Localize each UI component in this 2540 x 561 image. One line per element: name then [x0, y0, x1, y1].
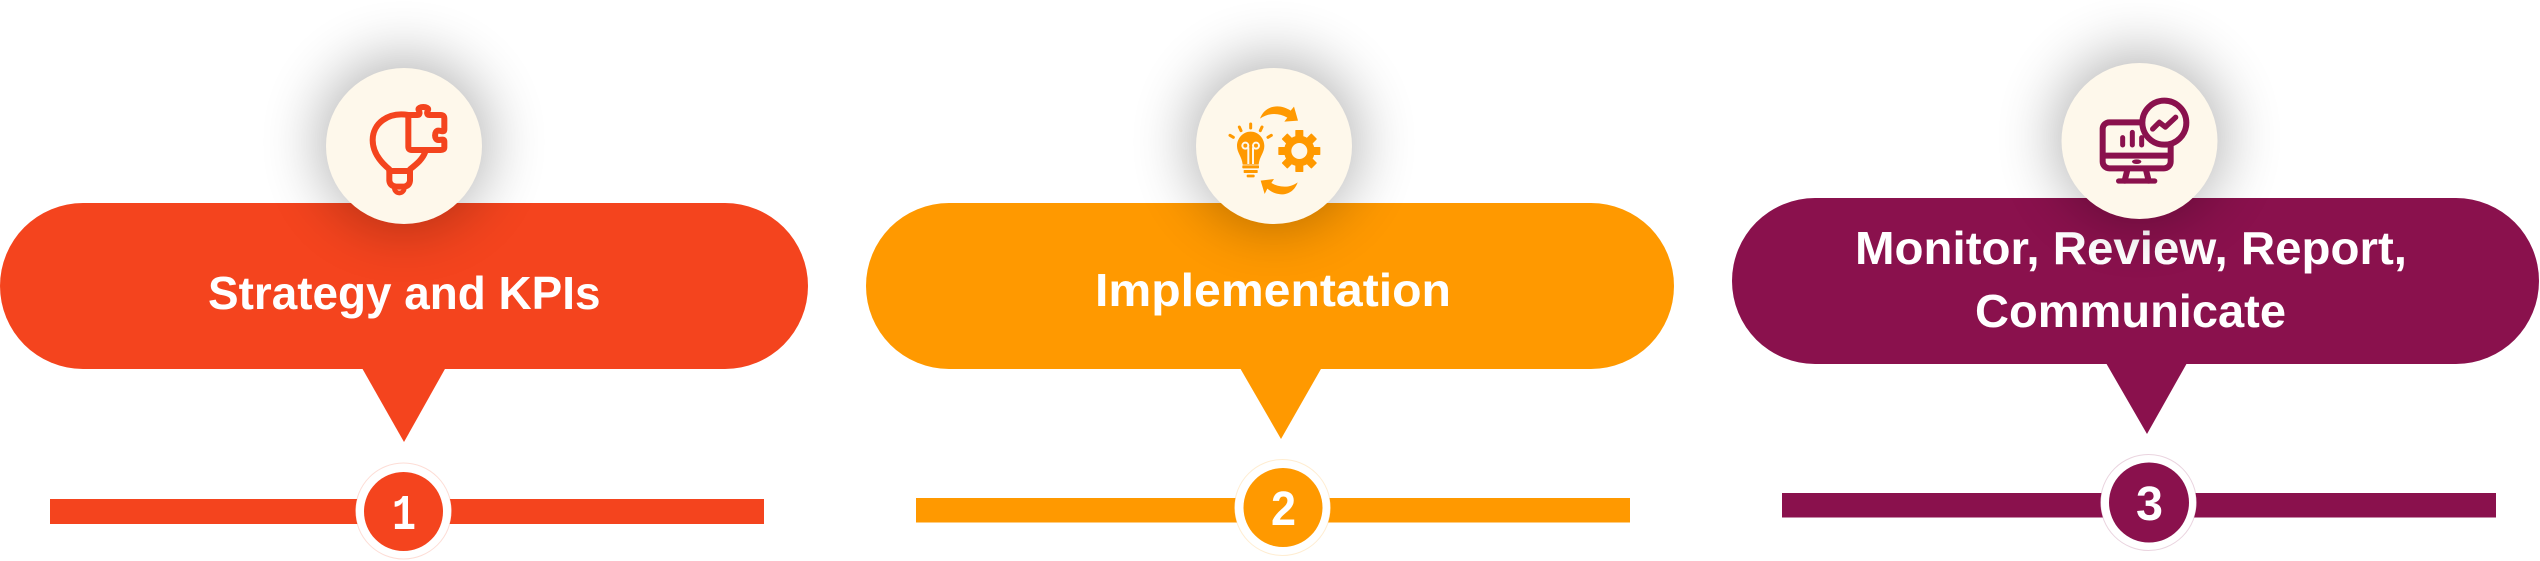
heading: monitor, review, report, communicate: Communicate [1975, 285, 2286, 337]
heading: monitor, review, report, communicate [1855, 222, 2407, 337]
heading: implementation: Implementation [1095, 264, 1451, 316]
speech bubble: strategy [0, 203, 808, 442]
panel: implementation [866, 58, 1674, 556]
timeline bar: step 1 [50, 499, 764, 524]
speech bubble: implementation [866, 203, 1674, 439]
step number: 1: 1 [392, 488, 416, 545]
timeline bar: step 2 [916, 498, 1630, 522]
step number: 3: 3 [2136, 478, 2163, 531]
icon badge: bulb, gear and cycle arrows [1190, 58, 1358, 226]
step number: 2: 2 [1271, 483, 1296, 536]
timeline bar: step 3 [1782, 493, 2496, 518]
step number: 1 [356, 463, 452, 559]
heading: strategy: Strategy and KPIs [208, 267, 600, 319]
step number: 2 [1234, 460, 1330, 556]
panel: monitor, review, report, communicate [1732, 53, 2539, 550]
panel: strategy and KPIs [0, 58, 808, 559]
icon badge: bulb and puzzle [320, 58, 488, 226]
icon badge: monitor with trend magnifier [2056, 53, 2224, 221]
heading: monitor, review, report, communicate: Monitor, Review, Report, [1855, 222, 2407, 274]
step number: 3 [2100, 454, 2196, 550]
speech bubble: monitor [1732, 198, 2539, 434]
